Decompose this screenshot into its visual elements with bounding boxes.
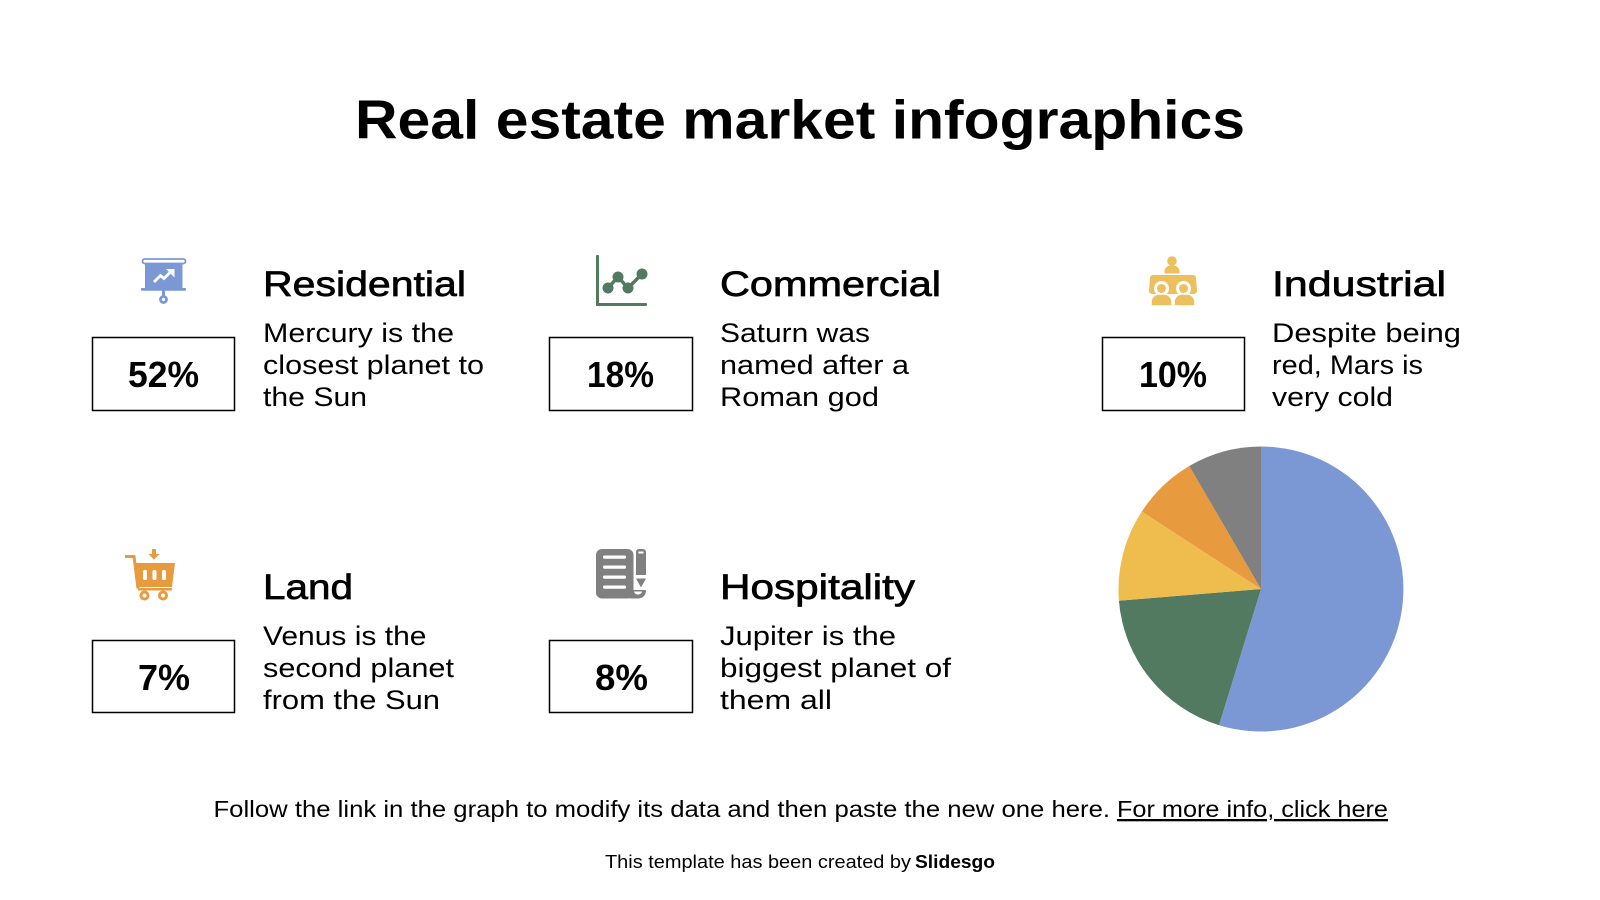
caption with link: Follow the link in the graph to modify its data and then paste the new one here. [214, 796, 1110, 822]
description [720, 318, 910, 412]
percentage box [1102, 338, 1244, 410]
description: Roman god [720, 382, 879, 412]
description: red, Mars is [1272, 350, 1423, 380]
description: the Sun [263, 382, 367, 412]
icon: shopping cart [125, 549, 175, 599]
heading: Hospitality [720, 567, 915, 607]
caption with link [214, 796, 1388, 822]
icon: meeting table [1149, 256, 1197, 306]
heading: Commercial [720, 264, 941, 304]
description: Mercury is the [263, 318, 454, 348]
percentage box [92, 640, 234, 712]
description: biggest planet of [720, 653, 952, 683]
icon: document and pencil [596, 549, 646, 598]
description [263, 318, 484, 412]
description: them all [720, 685, 832, 715]
credit line: Slidesgo [915, 851, 995, 872]
icon: presentation board [141, 259, 186, 302]
description [263, 621, 455, 715]
credit line: This template has been created by [605, 851, 912, 872]
heading: Residential [263, 264, 466, 304]
description: Saturn was [720, 318, 870, 348]
description: named after a [720, 350, 910, 380]
description: Venus is the [263, 621, 426, 651]
heading: Industrial [1272, 264, 1446, 304]
panel: Residential [92, 259, 484, 412]
panel: Commercial [550, 255, 941, 412]
caption with link: For more info, click here [1117, 796, 1388, 822]
icon: line chart [596, 255, 648, 306]
description: second planet [263, 653, 455, 683]
description: Despite being [1272, 318, 1461, 348]
percentage box [550, 640, 692, 712]
panel: Land [92, 549, 455, 715]
description: from the Sun [263, 685, 440, 715]
description [1272, 318, 1461, 412]
description: very cold [1272, 382, 1393, 412]
pie chart [1118, 446, 1403, 732]
percentage box: 7% [138, 657, 190, 698]
description [720, 621, 952, 715]
panel: Hospitality [550, 549, 952, 715]
percentage box: 52% [128, 354, 199, 395]
percentage box [550, 338, 692, 410]
title: Real estate market infographics [355, 88, 1245, 150]
description: closest planet to [263, 350, 484, 380]
percentage box: 8% [595, 657, 648, 698]
heading: Land [263, 567, 353, 607]
percentage box: 18% [587, 354, 654, 395]
percentage box [92, 338, 234, 410]
description: Jupiter is the [720, 621, 896, 651]
panel: Industrial [1102, 256, 1461, 412]
percentage box: 10% [1139, 354, 1207, 395]
